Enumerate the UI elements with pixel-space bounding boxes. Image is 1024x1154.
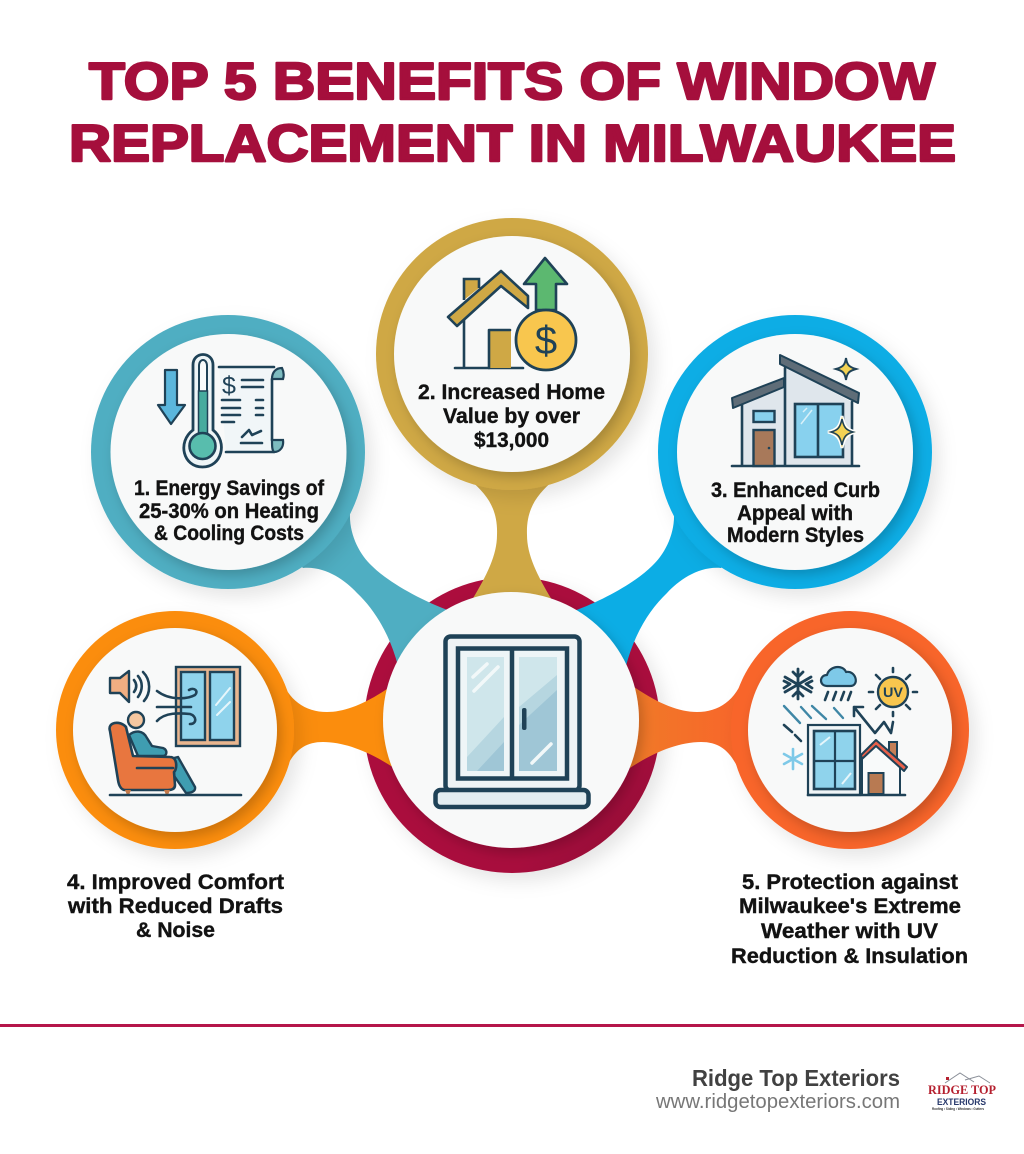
panel: benefit 1 energy savings	[91, 315, 365, 589]
icon: thermometer and bill: $	[222, 372, 236, 400]
text: benefit 1 label: 25-30% on Heating	[139, 499, 319, 523]
footer company name and URL: Ridge Top Exteriors	[692, 1065, 900, 1091]
logo: Ridge Top Exteriors: Roofing • Siding • Windows • Gutters	[932, 1106, 985, 1111]
icon: modern house	[732, 355, 859, 466]
text: benefit 5 label: 5. Protection against	[742, 870, 958, 894]
text: benefit 5 label: Reduction & Insulation	[731, 944, 968, 968]
text: benefit 1 label: & Cooling Costs	[154, 521, 304, 545]
panel: central window hub	[383, 592, 639, 848]
icon: house with rising value: $	[535, 319, 557, 363]
text: benefit 4 label: 4. Improved Comfort	[67, 870, 284, 894]
footer company name and URL: www.ridgetopexteriors.com	[655, 1091, 900, 1113]
logo: Ridge Top Exteriors: RIDGE TOP	[928, 1083, 996, 1097]
text: benefit 5 label: Milwaukee's Extreme	[739, 894, 961, 918]
panel: benefit 2 home value	[376, 218, 648, 490]
connector: gold	[470, 480, 554, 600]
text: benefit 1 label: 1. Energy Savings of	[134, 476, 325, 500]
text: benefit 5 label	[731, 870, 968, 968]
panel: benefit 5 weather protection	[731, 611, 969, 849]
connector: red-orange	[630, 676, 744, 768]
icon: house with rising value	[448, 258, 576, 370]
text: benefit 4 label: with Reduced Drafts	[67, 894, 283, 918]
footer company name and URL	[655, 1065, 900, 1113]
divider line	[0, 1024, 1024, 1027]
icon: weather and window	[784, 667, 917, 795]
text: benefit 4 label: & Noise	[136, 918, 215, 942]
text: benefit 3 label	[711, 478, 880, 547]
connector: blue	[574, 495, 744, 666]
text: benefit 3 label: Modern Styles	[727, 523, 864, 547]
text: benefit 3 label: Appeal with	[737, 501, 853, 525]
connector: teal	[280, 495, 450, 666]
logo: Ridge Top Exteriors: EXTERIORS	[937, 1097, 986, 1107]
title: REPLACEMENT IN MILWAUKEE	[69, 115, 956, 173]
central hub ring	[364, 577, 660, 873]
connector: orange	[280, 676, 394, 768]
text: benefit 4 label	[67, 870, 284, 942]
panel: benefit 4 comfort	[56, 611, 294, 849]
text: benefit 2 label: $13,000	[474, 428, 549, 452]
text: benefit 5 label: Weather with UV	[761, 919, 939, 943]
title: TOP 5 BENEFITS OF WINDOW	[89, 53, 936, 111]
text: benefit 2 label: Value by over	[443, 404, 581, 428]
panel: benefit 3 curb appeal	[658, 315, 932, 589]
icon: thermometer and bill	[158, 354, 284, 467]
title	[69, 53, 956, 173]
icon: person in armchair by window	[110, 667, 241, 795]
text: benefit 2 label: 2. Increased Home	[418, 380, 605, 404]
text: benefit 2 label	[418, 380, 605, 452]
text: benefit 3 label: 3. Enhanced Curb	[711, 478, 880, 502]
icon: window	[436, 636, 588, 807]
logo: Ridge Top Exteriors	[928, 1073, 996, 1111]
icon: weather and window: UV	[883, 684, 904, 700]
text: benefit 1 label	[134, 476, 325, 545]
